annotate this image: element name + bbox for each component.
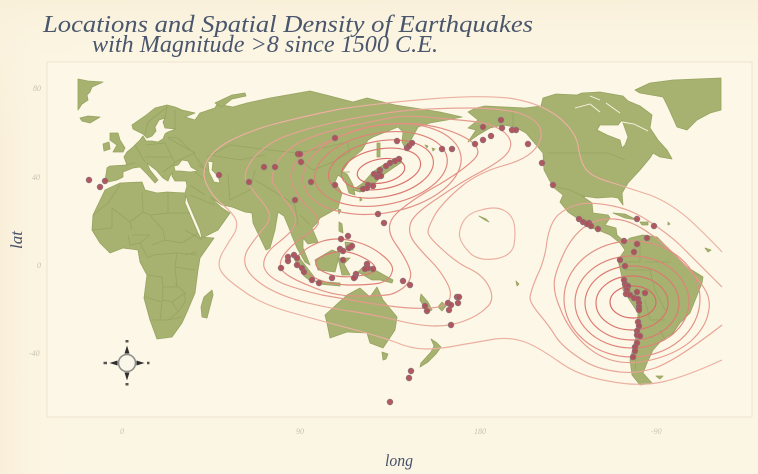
land: Greenland [635,78,721,130]
y axis tick labels: 0 [37,261,41,270]
water: Black Sea [174,160,198,172]
title [42,12,533,58]
y axis tick labels [29,84,41,358]
contour: Asia-Pacific level 5 [280,124,478,296]
contour: South America ring 5 [564,241,700,357]
land: Ireland [103,142,110,151]
land: New Guinea [358,265,393,283]
contour: Indonesia inner [316,252,376,277]
land: Tasmania [382,352,388,360]
land: Iceland [80,116,100,123]
y axis title: lat [7,230,26,249]
contour: outermost global [204,97,722,384]
contour: mid-Pacific lobe [459,208,515,259]
x axis tick labels [120,427,662,436]
land: Mindanao [345,242,353,250]
world map land [78,78,721,385]
x axis title: long [385,451,413,470]
x axis tick labels: 90 [296,427,304,436]
x axis tick labels: -90 [651,427,662,436]
contour: South America ring 2 [596,276,668,330]
contour: Japan ring 5 [296,112,468,226]
title: Locations and Spatial Density of Earthquakes [42,12,533,38]
contour: South America ring 1 [610,286,656,318]
land: Kuril and small islands [338,145,711,252]
icon: compass rose [104,340,150,386]
earthquake points [86,117,657,405]
x axis tick labels: 0 [120,427,124,436]
land: Sumatra [292,255,315,282]
land: Eurasia and Africa [92,91,462,339]
contour: Indonesia outer [296,239,393,285]
arctic channels [575,96,648,131]
contour: Japan ring 2 [338,142,424,196]
contour: Asia-Pacific level 7 [245,108,541,326]
land: Luzon [339,222,343,233]
land: Sakhalin [377,143,380,157]
contour: Japan ring 1 [355,155,407,187]
contour: South America ring 6 [554,219,709,363]
contour: Asia-Pacific level 6 [264,116,511,308]
land: Pacific islands [420,216,519,312]
land: Greenland east end [78,79,103,110]
water: Hudson Bay [597,120,628,148]
land: Madagascar [201,290,213,318]
land: Java [315,281,340,286]
land: Falklands [656,376,663,379]
y axis tick labels: 40 [32,173,40,182]
land: Novaya Zemlya [215,93,246,107]
land: Japan [353,157,402,192]
land: Great Britain [110,133,125,152]
y axis tick labels: -40 [29,349,40,358]
contour: South America ring 3 [585,266,679,340]
contour: South America open outer [530,203,722,372]
x axis tick labels: 180 [474,427,486,436]
plot panel [47,62,752,417]
land: Sulawesi [338,258,350,275]
water: Caspian Sea [208,161,220,183]
contour: South America ring 4 [575,256,689,348]
y axis tick labels: 80 [33,84,41,93]
contour: Japan ring 4 [309,122,453,216]
density contours [204,97,722,384]
land: Cuba and Hispaniola [613,213,648,225]
land: Alaska, North America and South America [468,92,703,385]
land: Borneo [315,250,340,272]
contour: Japan ring 3 [324,132,438,206]
title: with Magnitude >8 since 1500 C.E. [92,32,438,58]
land: Australia [325,287,397,348]
country borders [93,107,670,370]
land: New Zealand [420,339,441,367]
